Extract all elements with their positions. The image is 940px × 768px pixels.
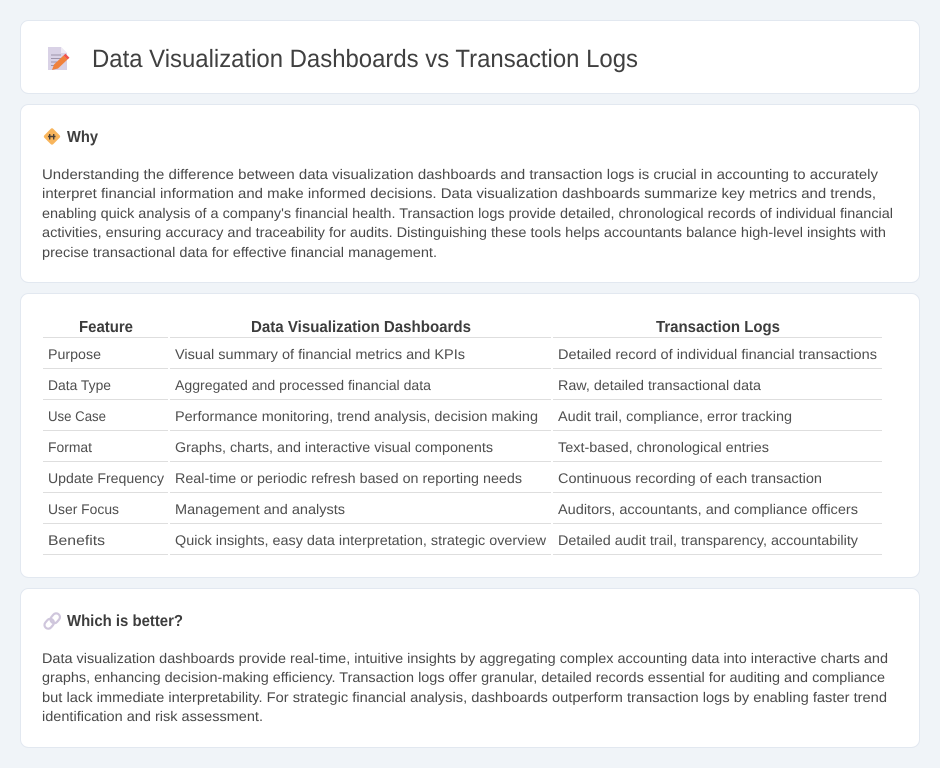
row: use case: Audit trail, compliance, error tracking — [558, 408, 792, 424]
row: user focus: User Focus — [48, 501, 119, 517]
table header — [43, 319, 882, 338]
row: user focus: Auditors, accountants, and compliance officers — [558, 501, 858, 517]
panel: header — [20, 20, 920, 94]
table header: Feature — [79, 319, 133, 336]
row: update frequency: Update Frequency — [48, 470, 164, 486]
row: data type: Raw, detailed transactional data — [558, 377, 761, 393]
row: data type: Aggregated and processed financial data — [175, 377, 431, 393]
text block: why paragraph: Understanding the difference between data visualization dashboards and transaction logs is crucial in accounting to accurately — [42, 166, 878, 182]
row: format: Format — [48, 439, 92, 455]
table header: Transaction Logs — [656, 319, 780, 336]
row: purpose — [43, 346, 882, 368]
heading: which is better: Which is better? — [67, 613, 183, 630]
text block: which is better paragraph: graphs, enhancing decision-making efficiency. Transaction logs offer granular, detailed records essential for auditing and compliance — [42, 669, 885, 685]
row: format — [43, 439, 882, 462]
row: benefits: Quick insights, easy data interpretation, strategic overview — [175, 532, 547, 548]
icon: warning diamond — [43, 128, 61, 145]
text block: why paragraph: enabling quick analysis of a company's financial health. Transaction logs provide detailed, chronological records of individual financial — [42, 205, 893, 221]
text block: why paragraph: interpret financial information and make informed decisions. Data visualization dashboards summarize key metrics and trends, — [42, 185, 876, 201]
table header: Data Visualization Dashboards — [251, 319, 471, 336]
title: Data Visualization Dashboards vs Transaction Logs — [92, 45, 638, 73]
row: data type — [43, 377, 882, 400]
row: update frequency: Real-time or periodic refresh based on reporting needs — [175, 470, 522, 486]
row: purpose: Detailed record of individual financial transactions — [558, 346, 877, 362]
text block: which is better paragraph — [42, 650, 888, 724]
text block: why paragraph — [42, 166, 893, 260]
row: purpose: Purpose — [48, 346, 101, 362]
text block: why paragraph: precise transactional data for effective financial management. — [42, 244, 437, 260]
panel: which is better — [20, 588, 920, 748]
text block: why paragraph: activities, ensuring accuracy and traceability for audits. Distinguishing these tools helps accountants balance high-level insights with — [42, 224, 886, 240]
panel: why — [20, 104, 920, 282]
text block: which is better paragraph: identification and risk assessment. — [42, 708, 263, 724]
icon: link — [43, 612, 61, 630]
row: data type: Data Type — [48, 377, 111, 393]
text block: which is better paragraph: Data visualization dashboards provide real-time, intuitive insights by aggregating complex accounting data into interactive charts and — [42, 650, 888, 666]
row: format: Graphs, charts, and interactive visual components — [175, 439, 493, 455]
row: benefits: Benefits — [48, 532, 105, 548]
row: format: Text-based, chronological entries — [558, 439, 769, 455]
text block: which is better paragraph: but lack immediate interpretability. For strategic financial analysis, dashboards outperform transaction logs by enabling faster trend — [42, 689, 887, 705]
row: purpose: Visual summary of financial metrics and KPIs — [175, 346, 465, 362]
row: user focus: Management and analysts — [175, 501, 345, 517]
row: update frequency — [43, 470, 882, 492]
panel: comparison table — [20, 294, 920, 578]
row: benefits — [43, 532, 882, 554]
row: update frequency: Continuous recording of each transaction — [558, 470, 822, 486]
row: use case — [43, 408, 882, 430]
row: use case: Performance monitoring, trend analysis, decision making — [175, 408, 538, 424]
icon: memo with pencil — [48, 47, 70, 70]
row: user focus — [43, 501, 882, 524]
heading: why: Why — [67, 129, 98, 146]
row: use case: Use Case — [48, 408, 106, 424]
row: benefits: Detailed audit trail, transparency, accountability — [558, 532, 858, 548]
